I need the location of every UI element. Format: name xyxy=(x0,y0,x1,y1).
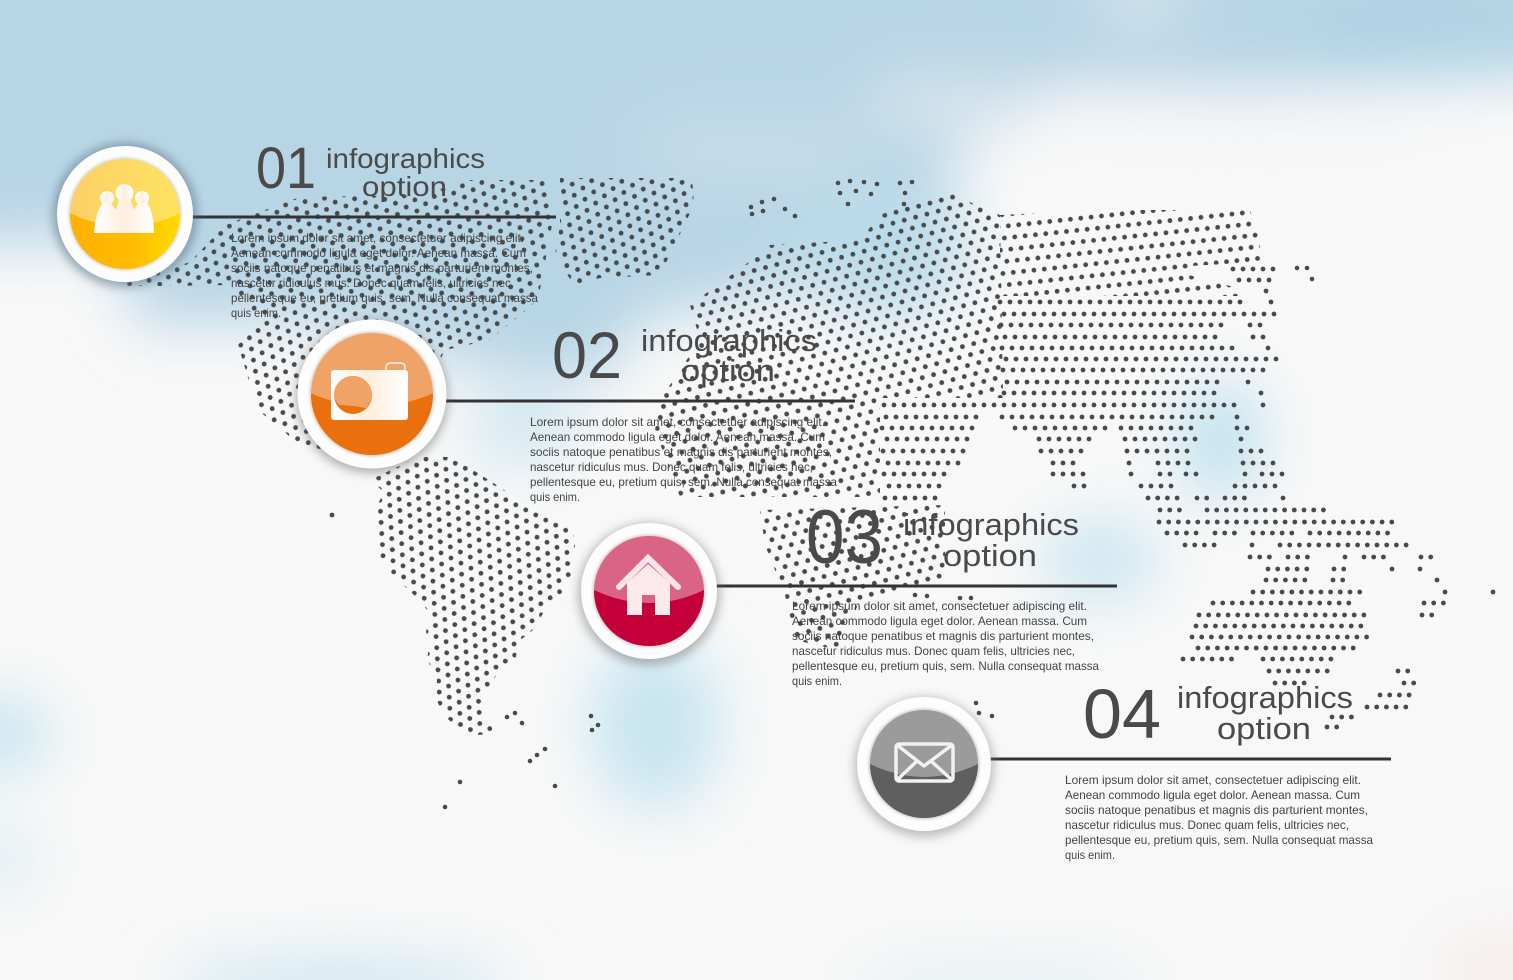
north Asia xyxy=(1000,210,1262,296)
Asia, South-East Asia, Indonesia and Australia dot rows xyxy=(882,269,1284,498)
number 02: 02 xyxy=(552,318,622,392)
body text 03: Lorem ipsum dolor sit amet, consectetuer adipiscing elit. xyxy=(792,599,1087,613)
body text 01: pellentesque eu, pretium quis, sem. Nulla consequat massa xyxy=(231,291,538,305)
body text 01: quis enim. xyxy=(231,306,281,320)
heading 02 xyxy=(641,323,817,388)
South America xyxy=(370,457,575,736)
dotted world map xyxy=(118,178,1495,809)
body text 02: quis enim. xyxy=(530,490,580,504)
body text 04: quis enim. xyxy=(1065,848,1115,862)
body text 01: sociis natoque penatibus et magnis dis parturient montes, xyxy=(231,261,533,275)
body text 03: Aenean commodo ligula eget dolor. Aenean massa. Cum xyxy=(792,614,1087,628)
body text 02 xyxy=(530,415,837,504)
body text 02: sociis natoque penatibus et magnis dis parturient montes, xyxy=(530,445,832,459)
connector line 01 xyxy=(185,216,556,218)
heading 01: option xyxy=(362,171,447,202)
panel: option 03 xyxy=(578,495,1117,688)
connector line 04 xyxy=(986,758,1391,760)
body text 04: pellentesque eu, pretium quis, sem. Nulla consequat massa xyxy=(1065,833,1373,847)
body text 02: nascetur ridiculus mus. Donec quam felis, ultricies nec, xyxy=(530,460,813,474)
Europe and west Asia xyxy=(655,190,1003,497)
body text 02: Lorem ipsum dolor sit amet, consectetuer adipiscing elit. xyxy=(530,415,825,429)
heading 04: infographics xyxy=(1177,680,1353,715)
Africa xyxy=(760,505,945,650)
icon button: home xyxy=(578,523,720,665)
body text 01: nascetur ridiculus mus. Donec quam felis, ultricies nec, xyxy=(231,276,514,290)
heading 01: infographics xyxy=(326,143,485,174)
body text 03: pellentesque eu, pretium quis, sem. Nulla consequat massa xyxy=(792,659,1099,673)
body text 02: pellentesque eu, pretium quis, sem. Nulla consequat massa xyxy=(530,475,837,489)
icon button: people xyxy=(53,143,197,287)
body text 04: nascetur ridiculus mus. Donec quam felis, ultricies nec, xyxy=(1065,818,1349,832)
body text 04: Aenean commodo ligula eget dolor. Aenean massa. Cum xyxy=(1065,788,1360,802)
heading 02: option xyxy=(681,353,775,388)
body text 02: Aenean commodo ligula eget dolor. Aenean massa. Cum xyxy=(530,430,825,444)
body text 04: Lorem ipsum dolor sit amet, consectetuer adipiscing elit. xyxy=(1065,773,1361,787)
heading 01 xyxy=(326,143,485,202)
heading 03: option xyxy=(943,538,1037,573)
body text 01: Lorem ipsum dolor sit amet, consectetuer adipiscing elit. xyxy=(231,231,524,245)
number 03: 03 xyxy=(806,495,883,580)
panel: option 04 xyxy=(854,675,1391,862)
body text 03: nascetur ridiculus mus. Donec quam felis, ultricies nec, xyxy=(792,644,1075,658)
number 01: 01 xyxy=(256,136,316,201)
body text 03: quis enim. xyxy=(792,674,842,688)
panel: option 01 xyxy=(53,136,556,320)
body text 04 xyxy=(1065,773,1373,862)
body text 03: sociis natoque penatibus et magnis dis parturient montes, xyxy=(792,629,1094,643)
heading 02: infographics xyxy=(641,323,817,358)
North America xyxy=(118,180,552,462)
connector line 03 xyxy=(712,584,1117,588)
body text 04: sociis natoque penatibus et magnis dis parturient montes, xyxy=(1065,803,1368,817)
heading 04: option xyxy=(1217,711,1311,746)
body text 03 xyxy=(792,599,1099,688)
heading 03 xyxy=(903,507,1079,573)
body text 01: Aenean commodo ligula eget dolor. Aenean massa. Cum xyxy=(231,246,526,260)
scattered islands xyxy=(330,179,1495,809)
body text 01 xyxy=(231,231,538,320)
heading 03: infographics xyxy=(903,507,1079,542)
connector line 02 xyxy=(440,400,855,402)
panel: option 02 xyxy=(296,318,855,504)
Greenland xyxy=(555,178,694,287)
heading 04 xyxy=(1177,680,1353,746)
icon button: envelope xyxy=(854,697,994,837)
number 04: 04 xyxy=(1083,675,1161,753)
icon button: camera xyxy=(296,320,448,473)
